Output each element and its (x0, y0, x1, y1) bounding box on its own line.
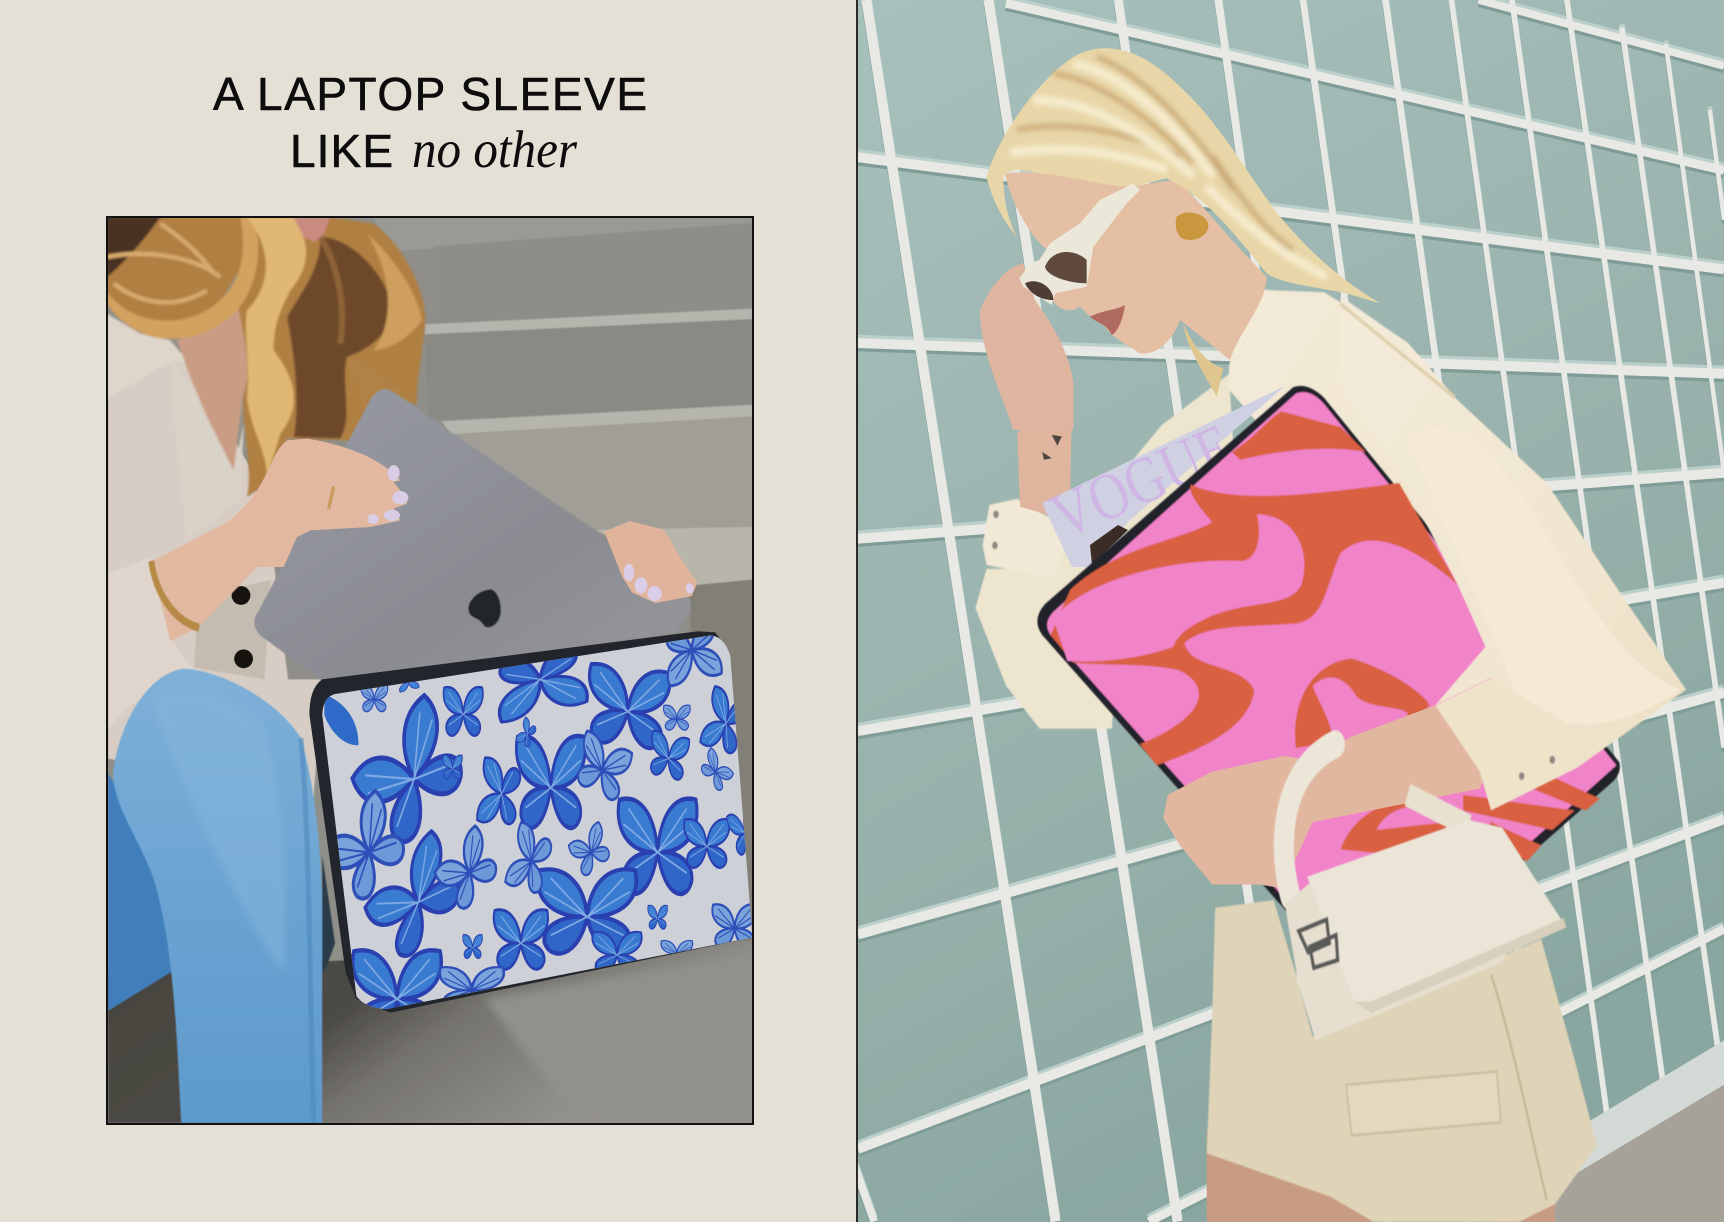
shirt body and left sleeve (975, 290, 1485, 729)
jacket buttons (232, 586, 253, 668)
apple logo (468, 589, 501, 627)
right hand (604, 521, 697, 603)
photo: woman carrying pink swirl sleeve against glass block wall (854, 0, 1724, 1222)
glass block wall (854, 0, 1724, 1222)
skirt (1207, 900, 1597, 1222)
shirt cuff (1435, 678, 1577, 810)
raised hand (980, 263, 1073, 430)
title: no other (412, 121, 577, 179)
face and neck (1005, 172, 1267, 360)
white handbag (1284, 744, 1566, 1040)
vertical divider (856, 0, 858, 1222)
forearm and bracelet (148, 522, 258, 642)
legs (1207, 1130, 1555, 1222)
forearm and hand (1163, 705, 1488, 888)
earring (1176, 213, 1208, 240)
jeans (108, 669, 335, 1123)
pink swirl sleeve (1036, 384, 1621, 912)
raised wrist (1017, 430, 1072, 515)
orange swirls (1051, 411, 1600, 861)
laptop (254, 389, 691, 681)
blonde hair (987, 48, 1380, 303)
frame around left photo (107, 217, 753, 1124)
shirt sleeve over sleeve (1341, 296, 1686, 768)
title: A LAPTOP SLEEVE (213, 68, 647, 120)
hair, neck and collar (108, 218, 426, 498)
head (980, 48, 1380, 430)
title (213, 68, 647, 179)
title: LIKE (290, 125, 393, 177)
photo: woman sliding laptop into butterfly sleeve (100, 210, 770, 1130)
concrete stairs (100, 210, 770, 1130)
hair wisp (1183, 323, 1223, 397)
magazine: VOGUE (1040, 410, 1244, 554)
butterfly laptop sleeve (309, 631, 752, 1013)
jacket (108, 319, 322, 797)
butterflies (323, 620, 763, 1037)
lips (1090, 305, 1125, 335)
sunglasses (1019, 183, 1140, 305)
left hand (226, 438, 408, 567)
